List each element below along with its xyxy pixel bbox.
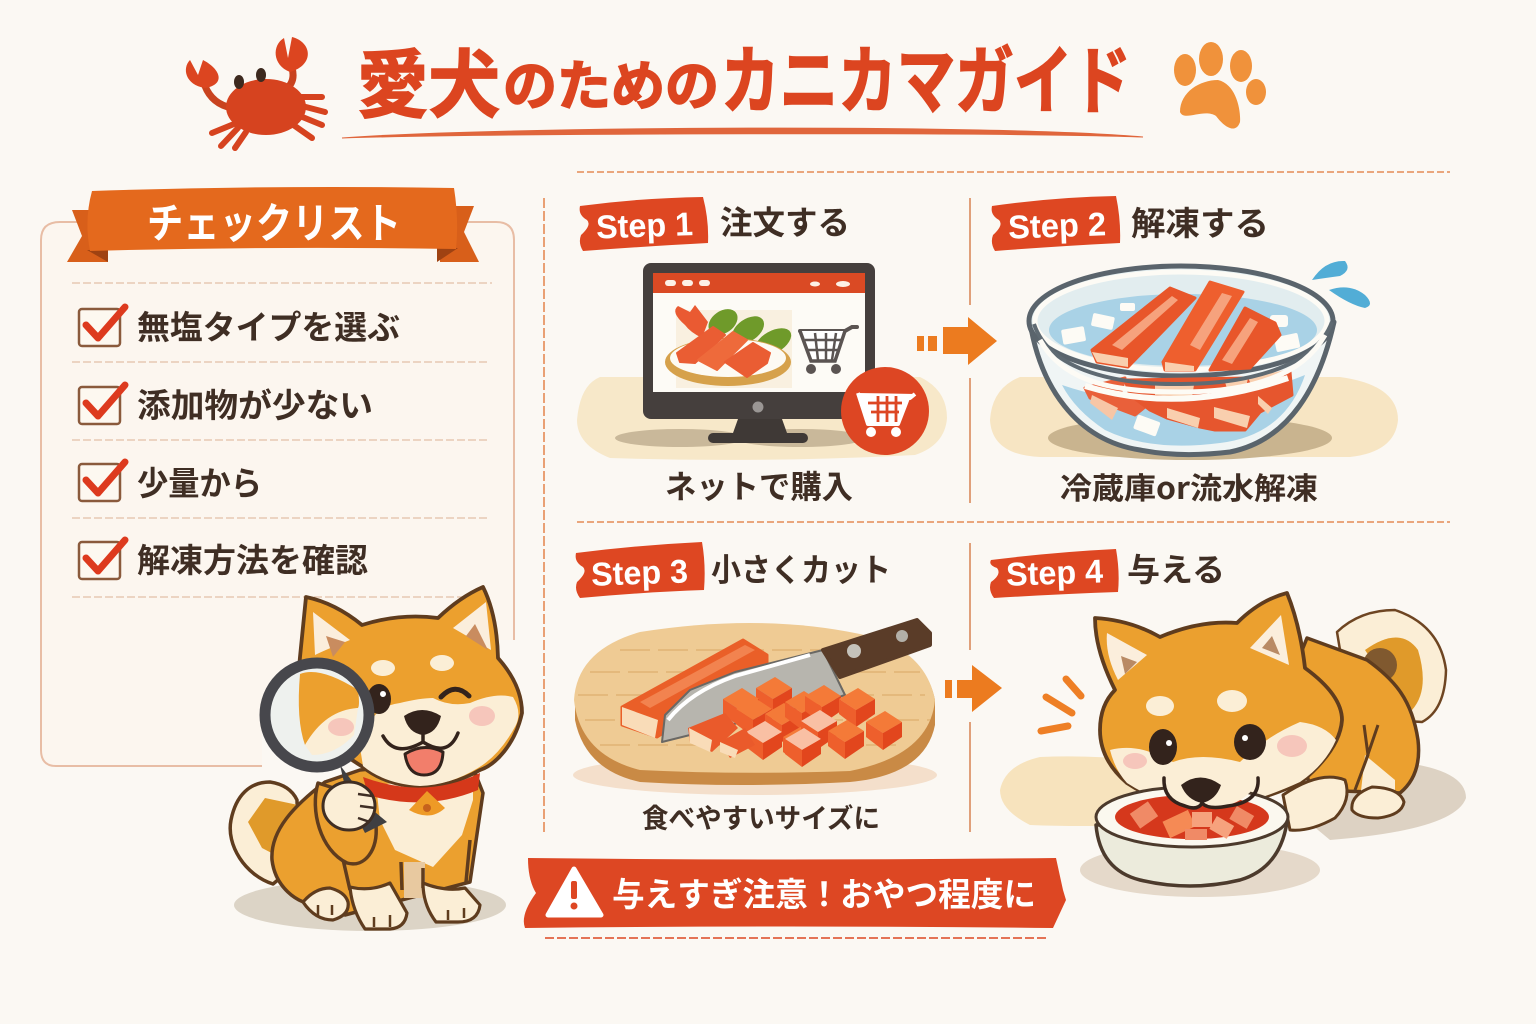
illustration: shiba with magnifying glass — [230, 587, 522, 931]
illustration: computer and cart — [577, 263, 947, 460]
title: カニカマガイド — [721, 22, 1131, 129]
title underline — [342, 128, 1143, 138]
paws — [303, 883, 480, 929]
icon: water drops — [1312, 261, 1370, 308]
step 3 badge: Step 3 — [590, 552, 689, 593]
icon: warning — [548, 869, 601, 915]
title: のための — [503, 42, 719, 121]
decorative rules — [544, 172, 1450, 832]
panel: checklist — [41, 187, 516, 770]
warning banner: 与えすぎ注意！おやつ程度に — [612, 868, 1036, 916]
arrow 1 — [917, 317, 997, 365]
illustration: cutting board — [573, 620, 937, 795]
illustration: bowl of water — [990, 266, 1398, 460]
arrow 3 — [945, 665, 1002, 712]
step 2 caption: 冷蔵庫or流水解凍 — [1060, 464, 1318, 508]
step 4 badge: Step 4 — [1005, 552, 1104, 593]
check item 3 — [79, 457, 262, 505]
step 4 badge — [990, 549, 1119, 598]
step 1 badge — [580, 197, 708, 251]
illustration: shiba eating — [1000, 593, 1466, 897]
step 1 heading: 注文する — [720, 197, 850, 244]
checklist ribbon: チェックリスト — [147, 190, 401, 251]
lower sticks — [1085, 378, 1160, 415]
check item 2: 添加物が少ない — [137, 379, 373, 427]
step 3 heading: 小さくカット — [711, 545, 891, 591]
check item 4: 解凍方法を確認 — [137, 534, 368, 582]
step 1 caption: ネットで購入 — [665, 462, 853, 508]
title — [357, 22, 1131, 133]
red cart badge — [841, 367, 929, 455]
step 2 badge — [992, 196, 1120, 251]
screen cart — [800, 327, 857, 374]
food bowl — [1096, 787, 1288, 886]
checklist ribbon — [67, 187, 479, 262]
icon: paw — [1174, 42, 1266, 129]
upper sticks — [1210, 308, 1280, 370]
warning banner — [524, 858, 1066, 928]
step 1 badge: Step 1 — [595, 205, 694, 246]
step 2 heading: 解凍する — [1131, 197, 1269, 245]
step 3 badge — [576, 542, 705, 598]
check item 1: 無塩タイプを選ぶ — [137, 301, 400, 349]
icon: crab — [186, 37, 325, 148]
title: 愛犬 — [357, 26, 500, 133]
magnifying glass — [265, 663, 387, 833]
step 3 caption: 食べやすいサイズに — [642, 797, 880, 836]
motion lines — [1041, 679, 1081, 731]
step 2 badge: Step 2 — [1007, 205, 1107, 246]
check item 3: 少量から — [137, 457, 262, 505]
step 4 heading: 与える — [1127, 545, 1225, 591]
